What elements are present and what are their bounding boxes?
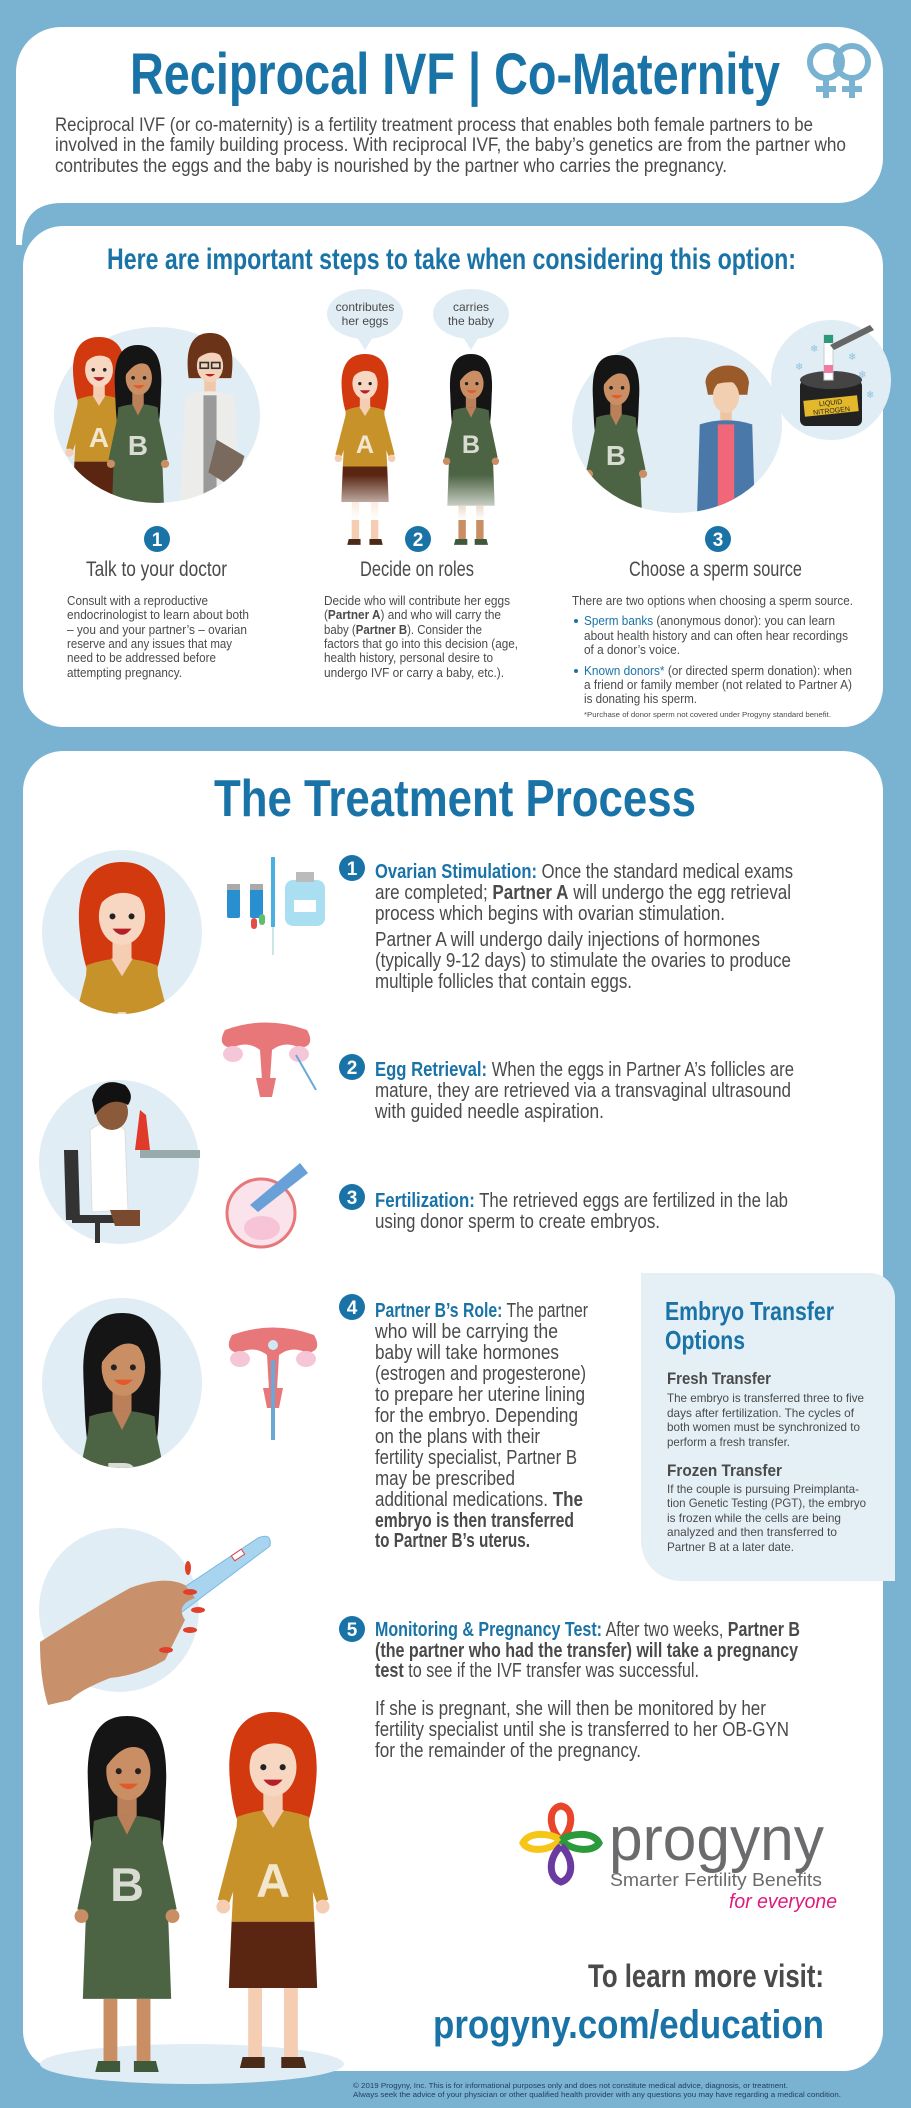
panel: treatment process xyxy=(23,751,895,2084)
step body 3: Known donors* (or directed sperm donation): when xyxy=(584,663,852,678)
number 2: 2 xyxy=(413,530,423,551)
logo: progyny: Smarter Fertility Benefits xyxy=(610,1870,822,1890)
speech bubble: carries the baby: carries xyxy=(453,300,489,314)
icon: liquid nitrogen xyxy=(771,320,891,440)
number 1 xyxy=(144,526,170,552)
intro text: involved in the family building process. With reciprocal IVF, the baby’s genetics are from the partner who xyxy=(55,135,846,156)
step 3 text: 3 xyxy=(347,1188,357,1209)
illustration: decide on roles xyxy=(320,289,520,680)
footer: disclaimer: © 2019 Progyny, Inc. This is for informational purposes only and does not constitute medical advice, diagnosis, or treatment. xyxy=(353,2081,788,2090)
step 1 text: (typically 9-12 days) to stimulate the ovaries to produce xyxy=(375,950,791,972)
step body 3: Sperm banks (anonymous donor): you can learn xyxy=(584,613,835,628)
step 2 text: Egg Retrieval: When the eggs in Partner A’s follicles are xyxy=(375,1059,794,1081)
step 4 text: to Partner B’s uterus. xyxy=(375,1530,530,1552)
step body 3: a friend or family member (not related to Partner A) xyxy=(584,677,852,692)
icon: liquid nitrogen: ❄ xyxy=(866,390,874,401)
step 5 text: test to see if the IVF transfer was successful. xyxy=(375,1660,699,1682)
callout: embryo transfer options: The embryo is transferred three to five xyxy=(667,1391,864,1405)
man xyxy=(697,366,754,512)
step 5 text: If she is pregnant, she will then be monitored by her xyxy=(375,1698,766,1720)
step 1 text: 1 xyxy=(347,859,358,880)
step 2 text: mature, they are retrieved via a transvaginal ultrasound xyxy=(375,1080,791,1102)
icon: uterus retrieval xyxy=(222,1022,316,1097)
callout: embryo transfer options: tion Genetic Testing (PGT), the embryo xyxy=(667,1496,866,1510)
step 4 text xyxy=(339,1294,588,1552)
intro text xyxy=(55,115,846,177)
callout: embryo transfer options: Embryo Transfer xyxy=(665,1296,834,1326)
number 3: 3 xyxy=(713,530,723,551)
footer: disclaimer xyxy=(353,2081,841,2099)
step 4 text: fertility specialist, Partner B xyxy=(375,1447,577,1469)
step 4 text: baby will take hormones xyxy=(375,1342,559,1364)
intro text: Reciprocal IVF (or co-maternity) is a fertility treatment process that enables both female partners to be xyxy=(55,115,813,136)
step 3 text: Fertilization: The retrieved eggs are fertilized in the lab xyxy=(375,1190,788,1212)
logo: progyny xyxy=(523,1805,837,1913)
icon: liquid nitrogen: ❄ xyxy=(848,352,856,363)
step body 2: baby (Partner B). Consider the xyxy=(324,622,482,637)
step body 3: *Purchase of donor sperm not covered under Progyny standard benefit. xyxy=(584,710,831,719)
step 4 text: for the embryo. Depending xyxy=(375,1405,578,1427)
callout: embryo transfer options: is frozen while the cells are being xyxy=(667,1511,841,1525)
step 4 text: who will be carrying the xyxy=(374,1321,558,1343)
illustration: talk to doctor xyxy=(54,327,260,680)
step 5 text: for the remainder of the pregnancy. xyxy=(375,1740,641,1762)
step body 1: Consult with a reproductive xyxy=(67,593,208,608)
panel: important steps xyxy=(23,226,891,727)
speech bubble: contributes her eggs: her eggs xyxy=(342,314,388,328)
step 4 text: on the plans with their xyxy=(375,1426,540,1448)
step body 3: is donating his sperm. xyxy=(584,691,697,706)
step title 2: Decide on roles xyxy=(360,558,474,581)
callout: embryo transfer options: analyzed and then transferred to xyxy=(667,1525,837,1539)
step 3 text xyxy=(339,1184,788,1233)
step 2 text xyxy=(339,1054,794,1123)
call to action: To learn more visit: xyxy=(588,1958,824,1994)
step body 3: of a donor’s voice. xyxy=(584,642,680,657)
speech bubble: contributes her eggs: contributes xyxy=(336,300,394,314)
number 2 xyxy=(405,526,431,552)
doctor xyxy=(180,333,244,500)
step 5 text xyxy=(339,1616,800,1762)
icon: liquid nitrogen: NITROGEN xyxy=(813,406,850,417)
step 4 text: to prepare her uterine lining xyxy=(375,1384,585,1406)
step body 2: (Partner A) and who will carry the xyxy=(324,607,501,622)
portrait: scientist xyxy=(39,1080,200,1244)
step 4 text: may be prescribed xyxy=(375,1468,515,1490)
callout: embryo transfer options xyxy=(641,1273,895,1581)
portrait: partner A xyxy=(42,850,202,1014)
step body 2: health history, personal desire to xyxy=(324,650,493,665)
speech bubble: contributes her eggs xyxy=(327,289,403,350)
step body 1: reserve and any issues that may xyxy=(67,636,232,651)
step body 1: attempting pregnancy. xyxy=(67,665,182,680)
icon: double venus xyxy=(810,46,868,98)
heading: treatment process: The Treatment Process xyxy=(214,770,696,828)
step 3 text: using donor sperm to create embryos. xyxy=(375,1211,660,1233)
icon: egg fertilization xyxy=(227,1163,308,1247)
step body 3 xyxy=(572,593,853,719)
step 4 text: (estrogen and progesterone) xyxy=(375,1363,586,1385)
step body 3: about health history and can often hear recordings xyxy=(584,628,848,643)
portrait: partner B xyxy=(42,1298,202,1468)
step body 3: There are two options when choosing a sperm source. xyxy=(572,593,853,608)
step 1 text: process which begins with ovarian stimulation. xyxy=(375,903,725,925)
step 1 text: Partner A will undergo daily injections of hormones xyxy=(375,929,760,951)
step 1 text: Ovarian Stimulation: Once the standard medical exams xyxy=(375,861,793,883)
icon: medicine xyxy=(227,857,325,955)
callout: embryo transfer options: Partner B at a later date. xyxy=(667,1540,794,1554)
step 4 text: Partner B’s Role: The partner xyxy=(375,1300,588,1322)
step body 2: Decide who will contribute her eggs xyxy=(324,593,510,608)
callout: embryo transfer options: both women must be synchronized to xyxy=(667,1420,860,1434)
icon: liquid nitrogen: ❄ xyxy=(795,362,803,373)
step 5 text: Monitoring & Pregnancy Test: After two weeks, Partner B xyxy=(375,1619,800,1641)
footer: disclaimer: Always seek the advice of your physician or other qualified health provider with any questions you may have regarding a medical condition. xyxy=(353,2090,841,2099)
step 2 text: 2 xyxy=(347,1058,357,1079)
step 2 text: with guided needle aspiration. xyxy=(374,1101,604,1123)
icon: liquid nitrogen: ❄ xyxy=(858,370,866,381)
callout: embryo transfer options: If the couple is pursuing Preimplanta- xyxy=(667,1482,859,1496)
icon: liquid nitrogen: LIQUID xyxy=(819,399,843,408)
callout: embryo transfer options: Fresh Transfer xyxy=(667,1369,771,1388)
icon: uterus transfer xyxy=(229,1328,317,1440)
step 5 text: 5 xyxy=(347,1620,358,1641)
number 1: 1 xyxy=(152,530,163,551)
step body 1: – you and your partner’s – ovarian xyxy=(67,622,247,637)
logo: progyny: for everyone xyxy=(729,1891,837,1913)
step body 1: endocrinologist to learn about both xyxy=(67,607,249,622)
number 3 xyxy=(705,526,731,552)
callout: embryo transfer options: perform a fresh transfer. xyxy=(667,1435,790,1449)
step 4 text: additional medications. The xyxy=(375,1489,583,1511)
illustration: hand with pregnancy test xyxy=(39,1528,270,1705)
step 4 text: 4 xyxy=(347,1298,358,1319)
step title 3: Choose a sperm source xyxy=(629,558,802,581)
call to action xyxy=(433,1958,824,2047)
call to action: progyny.com/education xyxy=(433,2003,824,2047)
step 5 text: fertility specialist until she is transferred to her OB-GYN xyxy=(375,1719,789,1741)
step body 1 xyxy=(67,593,249,680)
step 1 text: multiple follicles that contain eggs. xyxy=(375,971,632,993)
step body 2: factors that go into this decision (age, xyxy=(324,636,518,651)
step body 2: undergo IVF or carry a baby, etc.). xyxy=(324,665,504,680)
step 5 text: (the partner who had the transfer) will take a pregnancy xyxy=(375,1640,799,1662)
step body 2 xyxy=(324,593,518,680)
step 4 text: embryo is then transferred xyxy=(375,1510,574,1532)
step title 1: Talk to your doctor xyxy=(86,558,227,581)
speech bubble: carries the baby: the baby xyxy=(448,314,494,328)
callout: embryo transfer options: days after fertilization. The cycles of xyxy=(667,1406,855,1420)
illustration: sperm source xyxy=(572,320,891,719)
callout: embryo transfer options: Options xyxy=(665,1325,745,1355)
step 1 text: are completed; Partner A will undergo the egg retrieval xyxy=(375,882,791,904)
step 1 text xyxy=(339,855,793,993)
step body 1: need to be addressed before xyxy=(67,650,216,665)
icon: liquid nitrogen: ❄ xyxy=(810,344,818,355)
panel: intro xyxy=(16,27,883,245)
intro text: contributes the eggs and the baby is nourished by the partner who carries the pregnancy. xyxy=(55,156,727,177)
callout: embryo transfer options: Frozen Transfer xyxy=(667,1461,782,1480)
speech bubble: carries the baby xyxy=(433,289,509,350)
illustration: couple xyxy=(40,1712,344,2084)
logo: progyny: progyny xyxy=(609,1805,824,1874)
